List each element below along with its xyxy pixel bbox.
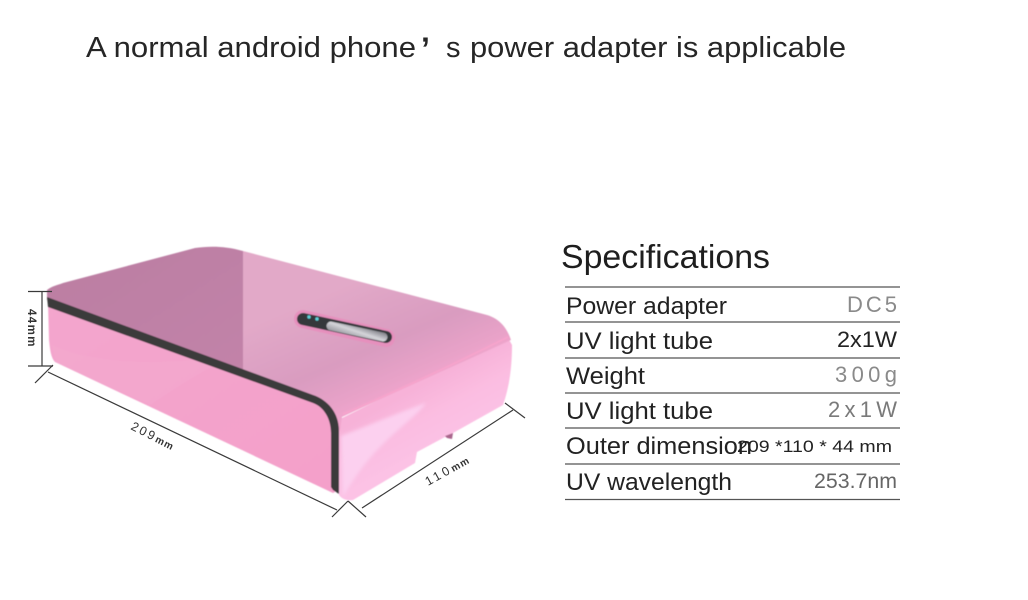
row: UV wavelength: 253.7nm [814, 470, 897, 493]
specifications table [565, 287, 900, 500]
specifications heading: Specifications [561, 238, 770, 275]
row: outer dimension [566, 433, 892, 460]
notch [445, 433, 453, 439]
title [86, 31, 846, 67]
dimension: width 110mm: 110mm [423, 453, 472, 489]
title: s [446, 32, 460, 64]
title: power adapter is applicable [470, 32, 846, 64]
dimension: length 209mm: 209mm [129, 419, 177, 453]
row: UV wavelength: UV wavelength [566, 469, 732, 496]
row: weight: Weight [566, 363, 645, 390]
row: power adapter: Power adapter [566, 293, 727, 320]
dimension: height 44mm: 44mm [25, 309, 37, 348]
row: UV light tube 2: 2x1W [828, 397, 897, 422]
row: weight [566, 362, 897, 390]
row: UV light tube 2 [566, 397, 897, 425]
dimension: width 110mm [348, 403, 525, 517]
front face [48, 303, 335, 493]
row: outer dimension: Outer dimension [566, 433, 752, 460]
row: UV light tube 2: UV light tube [566, 398, 713, 425]
product: pink UV sterilizer box [47, 247, 512, 500]
row: UV light tube: 2x1W [837, 327, 897, 352]
dimension: height 44mm [25, 291, 53, 366]
right end face [338, 336, 512, 500]
control panel [303, 315, 386, 338]
title: ’ [421, 31, 430, 67]
black seal strip [47, 297, 339, 494]
row: UV light tube [566, 327, 897, 355]
lid top right with rim [243, 251, 511, 432]
rim highlight [343, 337, 508, 414]
lid top left [47, 247, 243, 372]
row: power adapter [566, 292, 897, 320]
row: weight: 300g [835, 362, 897, 387]
row: outer dimension: 209 *110 * 44 mm [737, 437, 892, 456]
row: UV wavelength [566, 469, 897, 496]
dimension: length 209mm [35, 365, 348, 517]
row: UV light tube: UV light tube [566, 328, 713, 355]
row: power adapter: DC5 [847, 292, 897, 317]
title: A normal android phone [86, 32, 416, 64]
